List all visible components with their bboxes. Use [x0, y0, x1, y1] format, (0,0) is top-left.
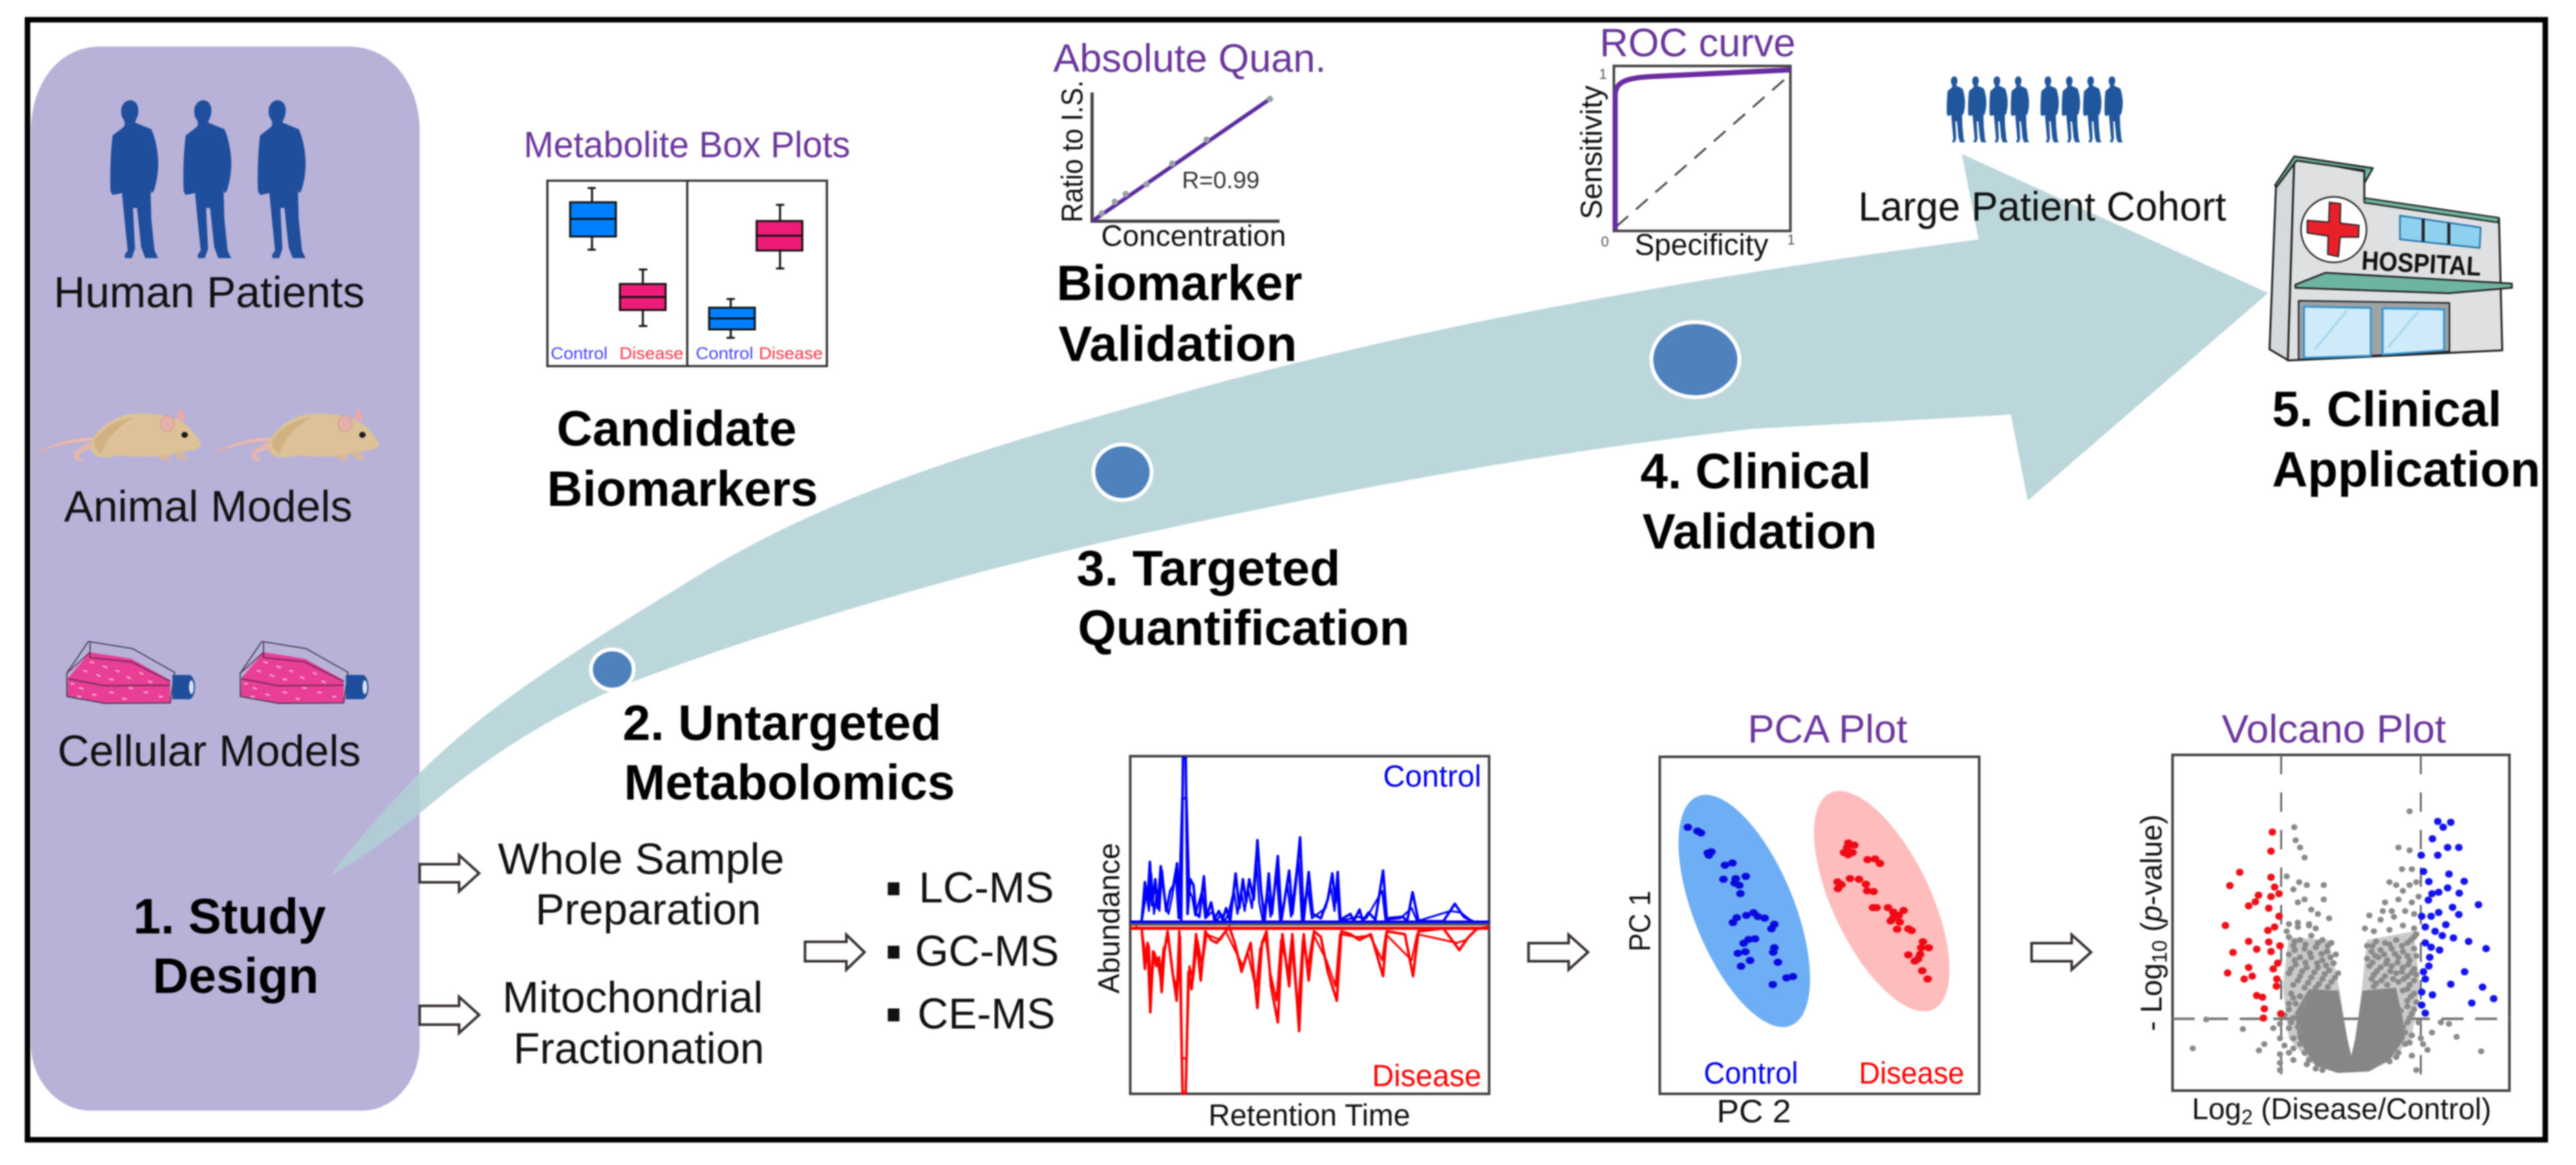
heading: clinical application: 5. Clinical [2272, 382, 2502, 437]
heading: biomarker validation: Biomarker [1057, 256, 1302, 311]
title: roc curve: ROC curve [1600, 21, 1796, 65]
label: large patient cohort: Large Patient Cohort [1858, 184, 2226, 230]
heading: study design: Design [153, 948, 319, 1004]
chart: chromatogram: Retention Time [1208, 1098, 1410, 1132]
chart: chromatogram [1092, 756, 1489, 1132]
chart: roc curve: 0 [1601, 234, 1609, 250]
icon: large patient cohort [1947, 76, 2123, 142]
chart: volcano plot: - Log [2134, 963, 2168, 1031]
chart: roc curve: 1 [1787, 232, 1795, 248]
text: whole sample preparation: Preparation [535, 886, 761, 934]
icon: human patients [111, 100, 306, 258]
chart: box plots: Control [551, 343, 608, 363]
chart: volcano plot [2134, 755, 2509, 1129]
text: mitochondrial fractionation: Fractionation [513, 1025, 764, 1073]
chart: roc curve [1574, 66, 1795, 261]
arrow: to platforms [805, 935, 864, 970]
chart: pca plot: PC 2 [1717, 1093, 1791, 1129]
text: mitochondrial fractionation [502, 974, 764, 1073]
chart: pca plot: Control [1704, 1056, 1798, 1090]
chart: roc curve: Specificity [1635, 228, 1768, 261]
chart: volcano plot: Log [2192, 1092, 2242, 1126]
heading: biomarker validation: Validation [1058, 316, 1297, 372]
step dot 3 [1093, 444, 1152, 500]
chart: chromatogram: Disease [1372, 1058, 1481, 1093]
chart: pca plot: Disease [1859, 1056, 1964, 1090]
arrow: to mitochondrial fractionation [420, 997, 479, 1033]
text: mitochondrial fractionation: Mitochondrial [502, 974, 763, 1022]
icon: mice [34, 407, 380, 461]
heading: clinical application [2272, 382, 2540, 497]
list: ms platforms: GC-MS [915, 927, 1059, 975]
chart: calibration curve: Ratio to I.S. [1055, 80, 1089, 223]
arrow: to volcano plot [2032, 935, 2091, 970]
chart: box plots: Disease [759, 343, 823, 363]
chart: chromatogram: Control [1383, 759, 1481, 793]
heading: candidate biomarkers: Candidate [557, 401, 797, 457]
chart: volcano plot: ( [2134, 922, 2168, 940]
heading: targeted quantification [1077, 541, 1410, 656]
text: whole sample preparation [498, 835, 784, 934]
heading: study design [133, 889, 326, 1004]
list: ms platforms: LC-MS [919, 864, 1054, 912]
title: metabolite box plots: Metabolite Box Plots [524, 124, 850, 166]
icon: cell culture flasks [67, 642, 369, 703]
chart: volcano plot: 2 [2241, 1105, 2253, 1129]
heading: clinical validation: Validation [1642, 504, 1877, 560]
icon: hospital [2270, 157, 2512, 360]
chart: pca plot [1623, 757, 1979, 1129]
chart: volcano plot: (Disease/Control) [2253, 1092, 2491, 1126]
chart: box plots: Control [696, 343, 753, 363]
text: whole sample preparation: Whole Sample [498, 835, 784, 884]
chart: calibration curve [1055, 80, 1286, 252]
heading: untargeted metabolomics: Metabolomics [624, 755, 955, 811]
chart: calibration curve: Concentration [1101, 219, 1286, 252]
chart: box plots: Disease [619, 343, 683, 363]
chart: volcano plot: p-value) [2134, 814, 2168, 922]
panel: study design models [31, 47, 420, 1111]
list: ms platforms [888, 864, 1059, 1038]
heading: clinical application: Application [2272, 442, 2540, 497]
curved progress arrow [330, 154, 2268, 876]
chart: calibration curve: R=0.99 [1182, 167, 1260, 193]
label: cellular models: Cellular Models [58, 727, 361, 776]
heading: candidate biomarkers: Biomarkers [547, 461, 818, 517]
title: volcano plot: Volcano Plot [2222, 707, 2446, 751]
arrow: to whole sample preparation [420, 855, 479, 891]
heading: clinical validation [1640, 444, 1877, 560]
heading: clinical validation: 4. Clinical [1640, 444, 1871, 499]
step dot 4 [1651, 322, 1739, 397]
list: ms platforms: CE-MS [918, 990, 1055, 1038]
heading: study design: 1. Study [133, 889, 326, 944]
chart: roc curve: Sensitivity [1574, 85, 1608, 219]
heading: targeted quantification: 3. Targeted [1077, 541, 1340, 596]
title: absolute quantification: Absolute Quan. [1053, 36, 1326, 80]
chart: pca plot: PC 1 [1623, 891, 1657, 952]
chart: roc curve: 1 [1599, 66, 1607, 82]
chart: volcano plot: 10 [2148, 940, 2171, 963]
chart: box plots [548, 180, 827, 366]
heading: untargeted metabolomics: 2. Untargeted [623, 695, 941, 751]
label: animal models: Animal Models [64, 483, 352, 531]
icon: hospital: HOSPITAL [2361, 245, 2482, 281]
title: pca plot: PCA Plot [1748, 707, 1907, 751]
heading: untargeted metabolomics [623, 695, 955, 811]
step dot 2 [591, 649, 634, 690]
heading: biomarker validation [1057, 256, 1302, 372]
heading: targeted quantification: Quantification [1078, 600, 1410, 656]
heading: candidate biomarkers [547, 401, 818, 517]
arrow: to pca plot [1529, 935, 1588, 970]
label: human patients: Human Patients [54, 268, 365, 317]
chart: chromatogram: Abundance [1092, 843, 1126, 994]
